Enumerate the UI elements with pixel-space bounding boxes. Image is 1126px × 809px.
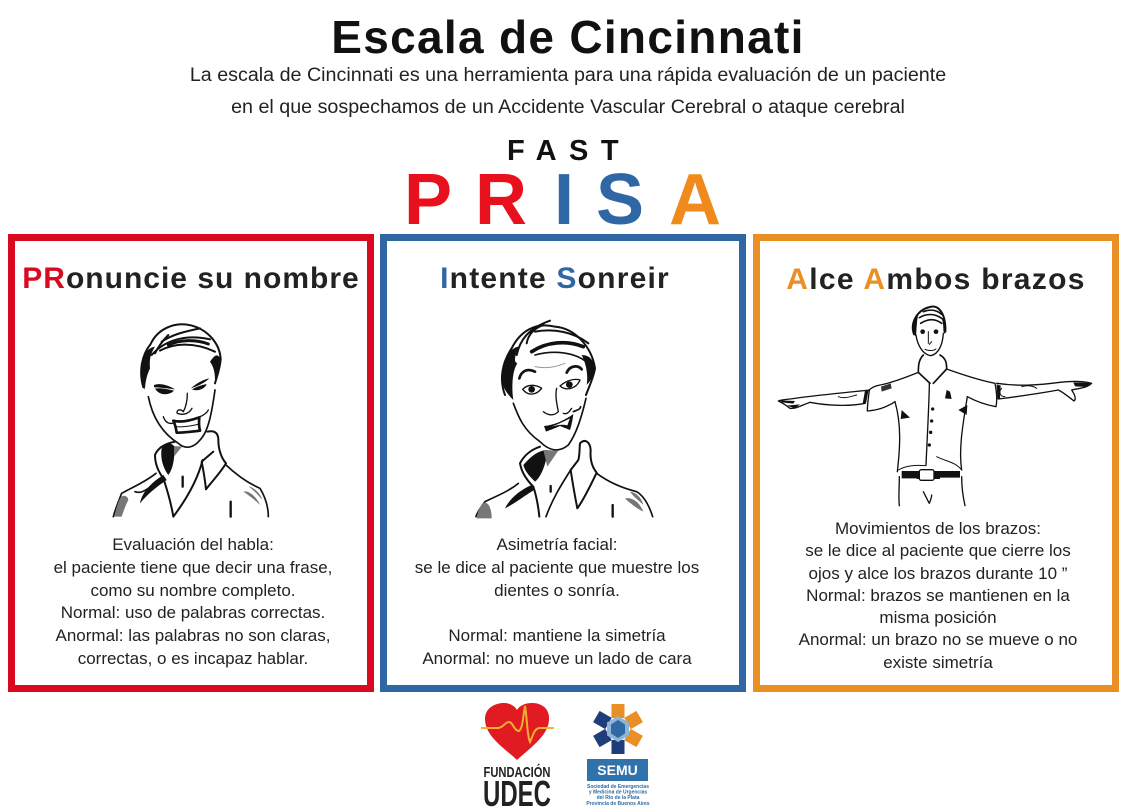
body text: misma posición <box>879 608 997 627</box>
PRISA acronym: I <box>554 160 574 240</box>
body text: como su nombre completo. <box>90 581 296 600</box>
title: Escala de Cincinnati <box>331 11 805 63</box>
body text: Anormal: las palabras no son claras, <box>56 626 330 645</box>
text: SEMU full name: del Río de la Plata <box>597 795 640 801</box>
body text: se le dice al paciente que cierre los <box>805 541 1071 560</box>
PRISA acronym: P <box>404 160 452 240</box>
panel: alce ambos brazos <box>753 234 1119 692</box>
heading: PRonuncie su nombre: PRonuncie su nombre <box>22 262 360 295</box>
body text <box>798 519 1077 672</box>
body text: Anormal: un brazo no se mueve o no <box>799 630 1077 649</box>
subtitle: La escala de Cincinnati es una herramienta para una rápida evaluación de un paciente <box>190 64 946 86</box>
icon: heart with pulse <box>481 703 554 760</box>
badge: SEMU: SEMU <box>597 762 638 778</box>
body text: ojos y alce los brazos durante 10 ” <box>809 564 1067 583</box>
body text: Normal: mantiene la simetría <box>448 626 666 645</box>
FAST label: FAST <box>507 135 631 167</box>
body text: Evaluación del habla: <box>112 535 274 554</box>
logo: SEMU <box>586 704 650 807</box>
PRISA acronym: R <box>475 160 527 240</box>
body text: se le dice al paciente que muestre los <box>415 558 699 577</box>
icon: man raising both arms <box>778 306 1092 506</box>
panel: pronuncie su nombre <box>8 234 374 692</box>
body text: dientes o sonría. <box>494 581 620 600</box>
body text: Normal: brazos se mantienen en la <box>806 586 1070 605</box>
body text: correctas, o es incapaz hablar. <box>78 649 308 668</box>
text: SEMU full name: y Medicina de Urgencias <box>589 790 647 796</box>
panel: intente sonreir <box>380 234 746 692</box>
PRISA acronym: S <box>596 160 644 240</box>
icon: star of life <box>593 704 643 754</box>
PRISA acronym <box>404 160 721 240</box>
heading: Intente Sonreir: Intente Sonreir <box>440 262 670 295</box>
subtitle: en el que sospechamos de un Accidente Vascular Cerebral o ataque cerebral <box>231 96 905 118</box>
body text: Normal: uso de palabras correctas. <box>61 603 325 622</box>
logo: Fundación UDEC <box>481 703 554 808</box>
body text: el paciente tiene que decir una frase, <box>54 558 332 577</box>
body text: Asimetría facial: <box>497 535 617 554</box>
text: SEMU full name: Sociedad de Emergencias <box>587 784 649 790</box>
text: SEMU full name: Provincia de Buenos Aires <box>586 801 650 807</box>
heading: Alce Ambos brazos: Alce Ambos brazos <box>786 263 1086 296</box>
body text <box>54 535 332 668</box>
PRISA acronym: A <box>669 160 721 240</box>
subtitle <box>190 64 946 118</box>
body text: existe simetría <box>883 653 993 672</box>
icon: man with facial asymmetry <box>475 320 654 518</box>
body text <box>415 535 699 668</box>
body text: Anormal: no mueve un lado de cara <box>422 649 692 668</box>
body text: Movimientos de los brazos: <box>835 519 1041 538</box>
icon: man with speech difficulty <box>112 323 270 518</box>
